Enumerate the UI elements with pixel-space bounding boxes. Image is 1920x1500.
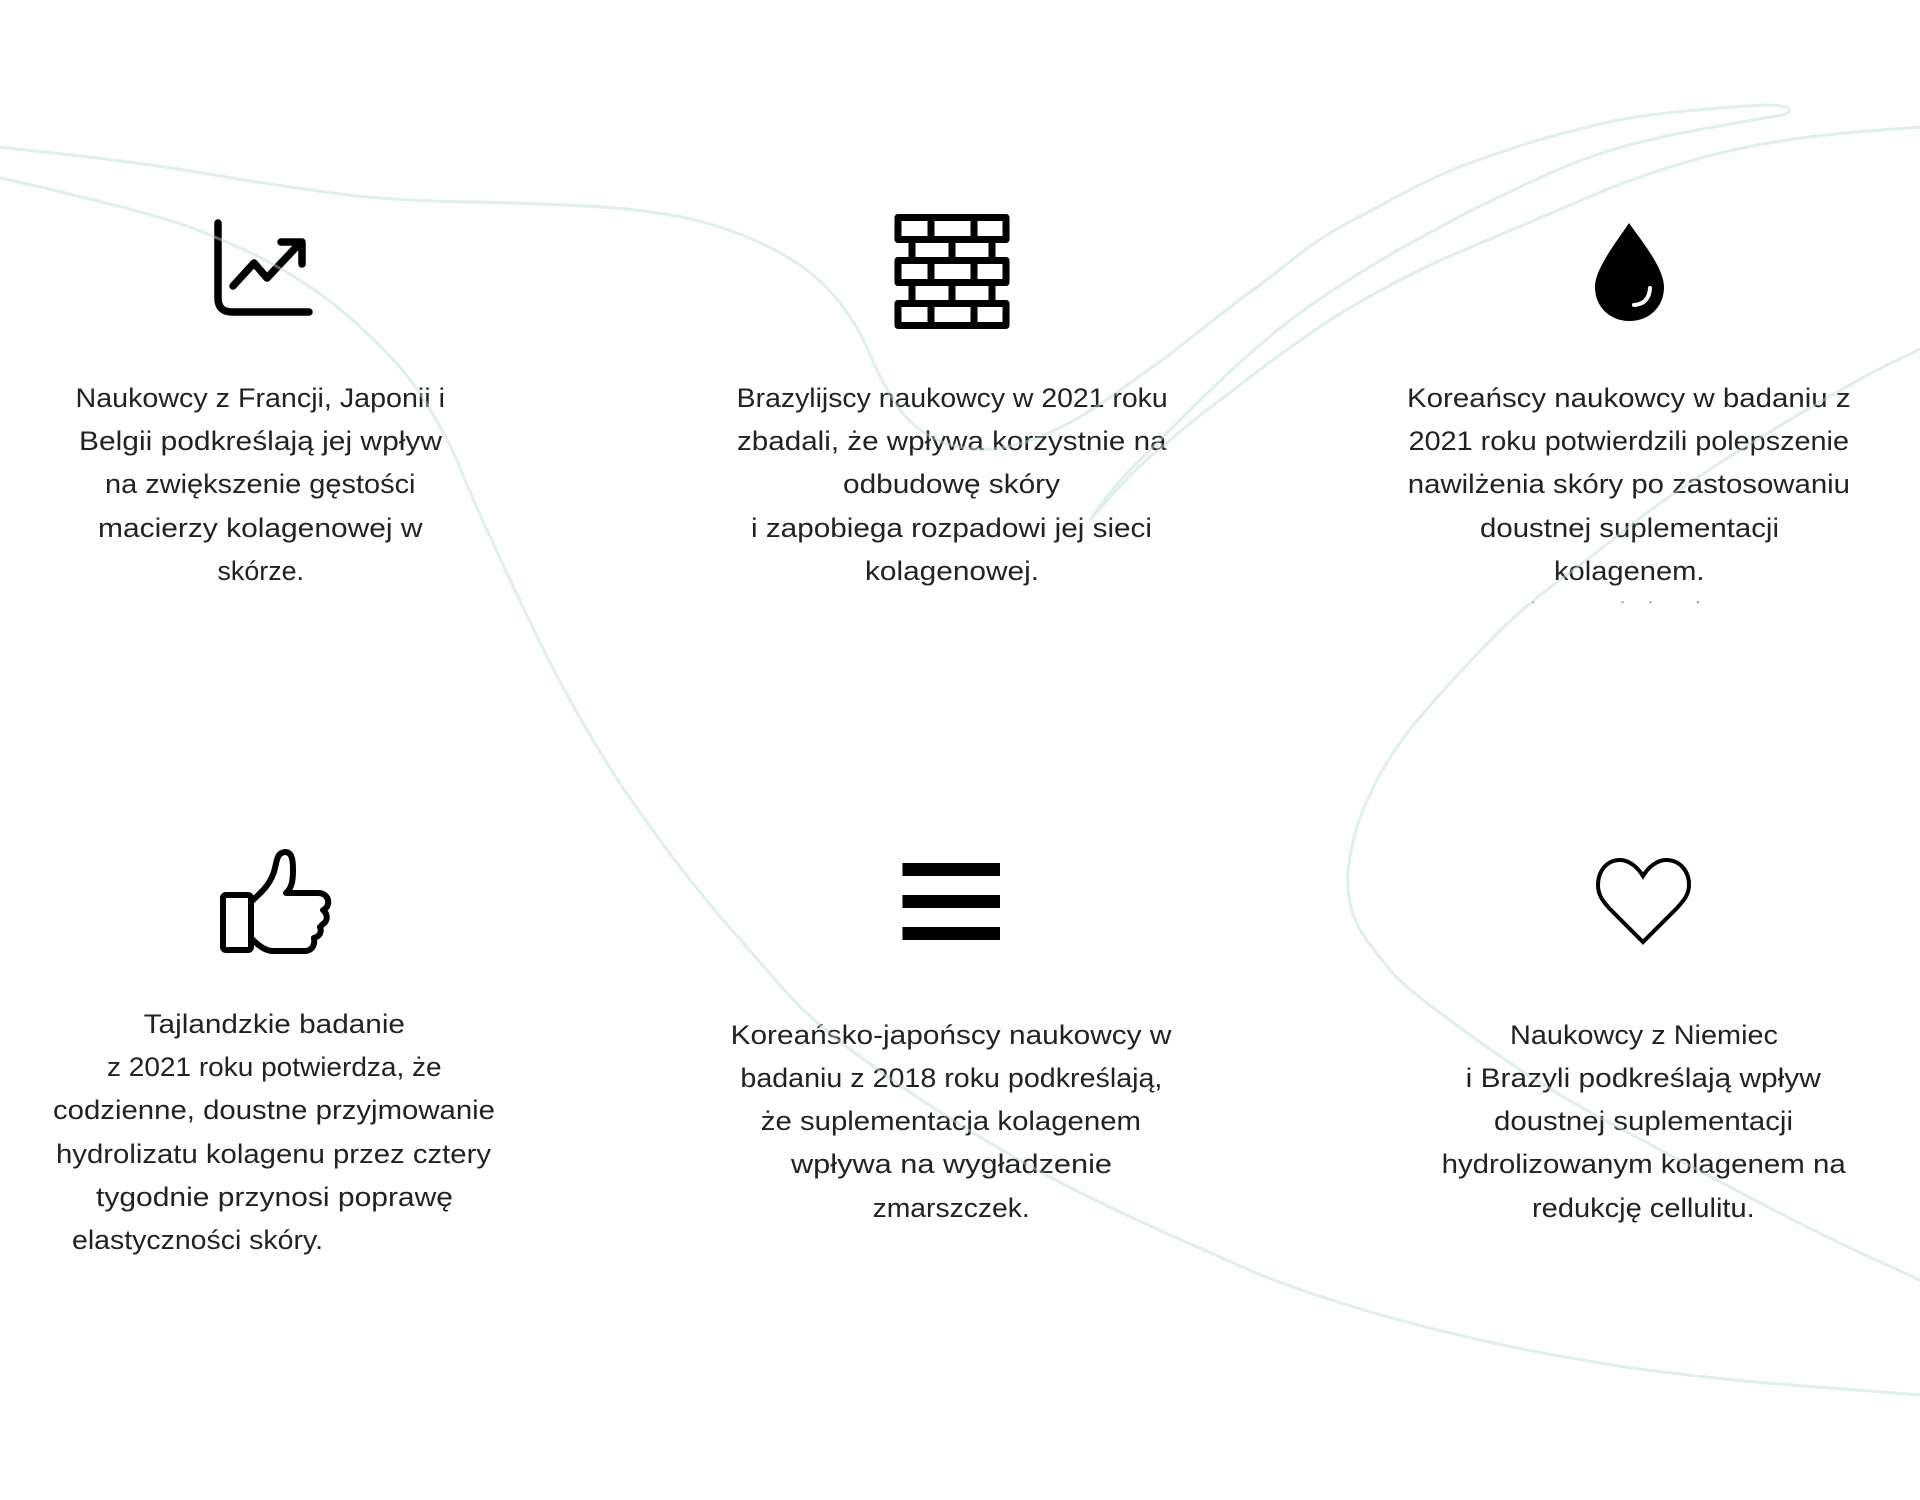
text: wrinkle study: zmarszczek. [873,1193,1030,1223]
text: density study: Naukowcy z Francji, Japonii i [76,383,445,413]
text: skin rebuild study: odbudowę skóry [843,469,1061,499]
text: cellulite study [1442,1020,1847,1223]
text: density study [76,383,445,586]
text: cellulite study: redukcję cellulitu. [1532,1193,1755,1223]
panel: wrinkle study [731,863,1172,1223]
text: elasticity study [53,1009,495,1255]
text: wrinkle study: wpływa na wygładzenie [790,1149,1112,1179]
text: hydration study: kolagenem. [1554,556,1704,586]
icon: thumbs up [223,852,328,951]
text: elasticity study: hydrolizatu kolagenu przez cztery [56,1139,492,1169]
text: hydration study: 2021 roku potwierdzili polepszenie [1409,426,1849,456]
text: hydration study: doustnej suplementacji [1480,513,1779,543]
text: cellulite study: i Brazyli podkreślają wpływ [1466,1063,1821,1093]
text: density study: Belgii podkreślają jej wpływ [79,426,443,456]
clipped text remnants [1532,602,1699,603]
panel: skin rebuild study [737,217,1168,586]
text: cellulite study: Naukowcy z Niemiec [1510,1020,1778,1050]
text: cellulite study: hydrolizowanym kolagenem na [1442,1149,1847,1179]
text: elasticity study: z 2021 roku potwierdza, że [107,1052,442,1082]
text: wrinkle study: Koreańsko-japońscy naukowcy w [731,1020,1172,1050]
text: wrinkle study: że suplementacja kolagenem [761,1106,1141,1136]
text: skin rebuild study [737,383,1168,586]
text: elasticity study: Tajlandzkie badanie [144,1009,405,1039]
text: wrinkle study: badaniu z 2018 roku podkreślają, [740,1063,1162,1093]
text: skin rebuild study: zbadali, że wpływa korzystnie na [737,426,1168,456]
text: elasticity study: codzienne, doustne przyjmowanie [53,1095,495,1125]
text: hydration study: Koreańscy naukowcy w badaniu z [1407,383,1851,413]
icon: water drop [1595,223,1664,321]
text: elasticity study: elastyczności skóry. [72,1225,323,1255]
text: hydration study: nawilżenia skóry po zastosowaniu [1408,469,1850,499]
text: skin rebuild study: Brazylijscy naukowcy w 2021 roku [737,383,1168,413]
text: wrinkle study [731,1020,1172,1223]
icon: three bars [902,863,1000,940]
text: skin rebuild study: i zapobiega rozpadowi jej sieci [751,513,1152,543]
text: density study: skórze. [218,556,304,586]
icon: brick wall [898,217,1006,326]
panel: density study [76,223,445,586]
icon: heart outline [1598,860,1689,942]
panel: hydration study [1407,223,1851,603]
panel: elasticity study [53,852,495,1255]
panel: cellulite study [1442,860,1847,1223]
icon: growth chart [218,223,309,312]
text: density study: na zwiększenie gęstości [105,469,416,499]
text: elasticity study: tygodnie przynosi poprawę [96,1182,453,1212]
text: skin rebuild study: kolagenowej. [865,556,1039,586]
text: density study: macierzy kolagenowej w [98,513,423,543]
text: cellulite study: doustnej suplementacji [1494,1106,1793,1136]
text: hydration study [1407,383,1851,586]
